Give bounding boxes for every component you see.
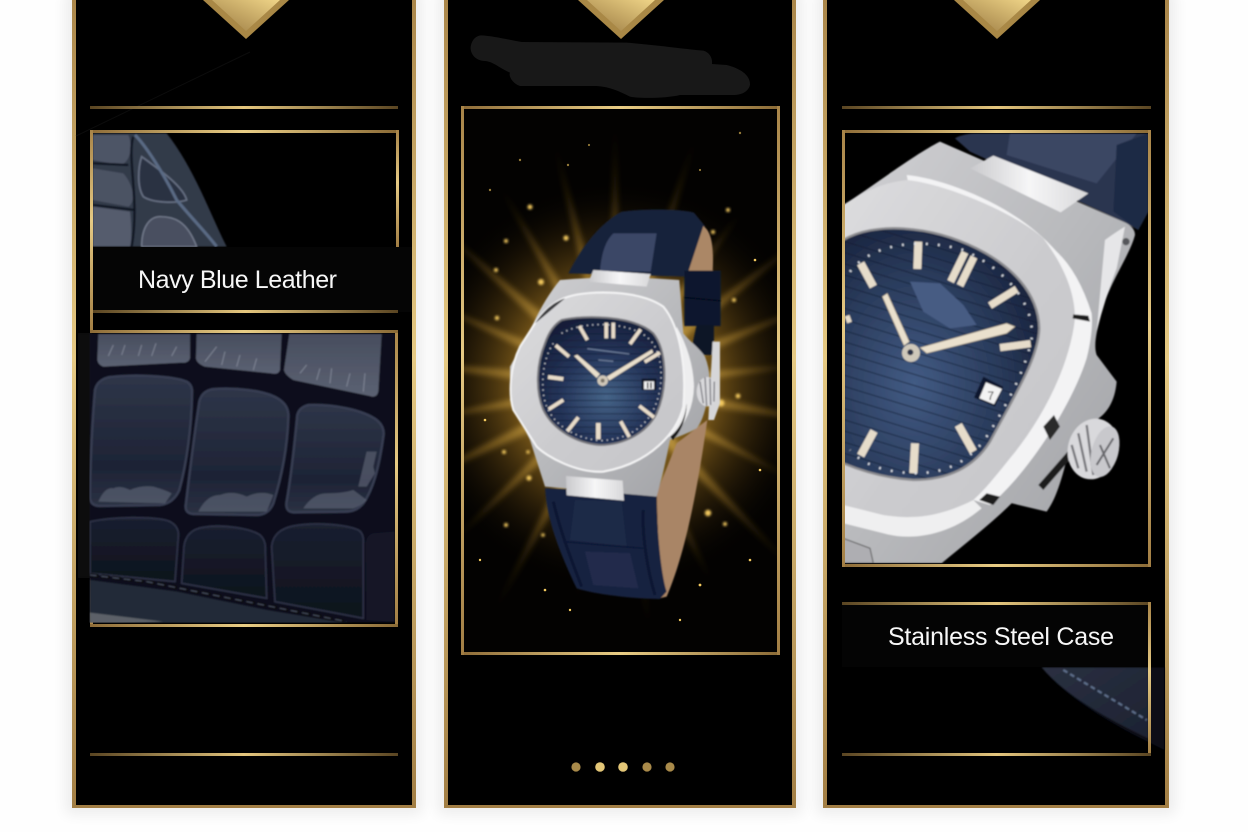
lug plates bbox=[566, 270, 651, 501]
panel: navy blue leather bbox=[66, 0, 422, 814]
watch close-up bbox=[840, 133, 1148, 563]
image frame: upper bbox=[90, 130, 399, 332]
bottom divider bbox=[90, 753, 398, 756]
crown bbox=[1066, 418, 1120, 480]
bottom strap bbox=[545, 420, 707, 599]
date window bbox=[974, 377, 1003, 407]
light rays bbox=[464, 164, 777, 578]
panel: center hero watch bbox=[438, 0, 802, 814]
panel: stainless steel case bbox=[817, 0, 1175, 814]
case body bbox=[843, 142, 1135, 563]
case body bbox=[510, 277, 709, 497]
image frame: croc leather close-up bbox=[78, 330, 398, 627]
watch illustration bbox=[510, 210, 721, 599]
image frame: steel close-up bbox=[842, 130, 1151, 567]
hour markers bbox=[846, 242, 1031, 473]
label frame bbox=[842, 602, 1151, 756]
date window: 7 bbox=[987, 389, 994, 403]
lug plate bbox=[970, 156, 1088, 212]
crown guard rail bbox=[708, 342, 720, 420]
crown bbox=[697, 377, 718, 406]
label band: Stainless Steel Case bbox=[842, 602, 1148, 667]
burst background bbox=[464, 132, 777, 622]
close-up: leather corner bbox=[93, 133, 227, 247]
bezel bbox=[511, 292, 684, 472]
icon: gold chevron bbox=[203, 0, 289, 39]
date window bbox=[642, 379, 656, 390]
label band: Navy Blue Leather bbox=[93, 247, 412, 312]
dial bbox=[538, 317, 664, 445]
pagination dots bbox=[571, 762, 675, 772]
image frame: hero bbox=[461, 106, 780, 655]
bezel bbox=[843, 180, 1075, 517]
label band: Stainless Steel Case: Stainless Steel Case bbox=[888, 623, 1114, 651]
minute track bbox=[850, 244, 1032, 473]
hands bbox=[574, 349, 653, 386]
top divider bbox=[842, 106, 1151, 109]
croc leather texture bbox=[89, 333, 395, 625]
top divider bbox=[90, 106, 398, 109]
polished side band bbox=[907, 175, 1092, 505]
hands bbox=[882, 293, 1015, 362]
icon: gold chevron bbox=[578, 0, 664, 39]
leather corner bbox=[1042, 667, 1164, 750]
label underline bbox=[93, 310, 398, 313]
dial bbox=[845, 228, 1040, 480]
gold sparkles bbox=[479, 132, 761, 621]
icon: gold chevron bbox=[954, 0, 1040, 39]
minute track bbox=[543, 325, 661, 441]
top strap bbox=[568, 210, 721, 355]
strap bbox=[955, 133, 1148, 230]
redacted heading blob bbox=[471, 35, 750, 98]
dial logo bbox=[587, 349, 629, 361]
label band: Navy Blue Leather: Navy Blue Leather bbox=[138, 266, 337, 294]
hour markers bbox=[548, 323, 660, 439]
polished side bbox=[663, 327, 694, 438]
